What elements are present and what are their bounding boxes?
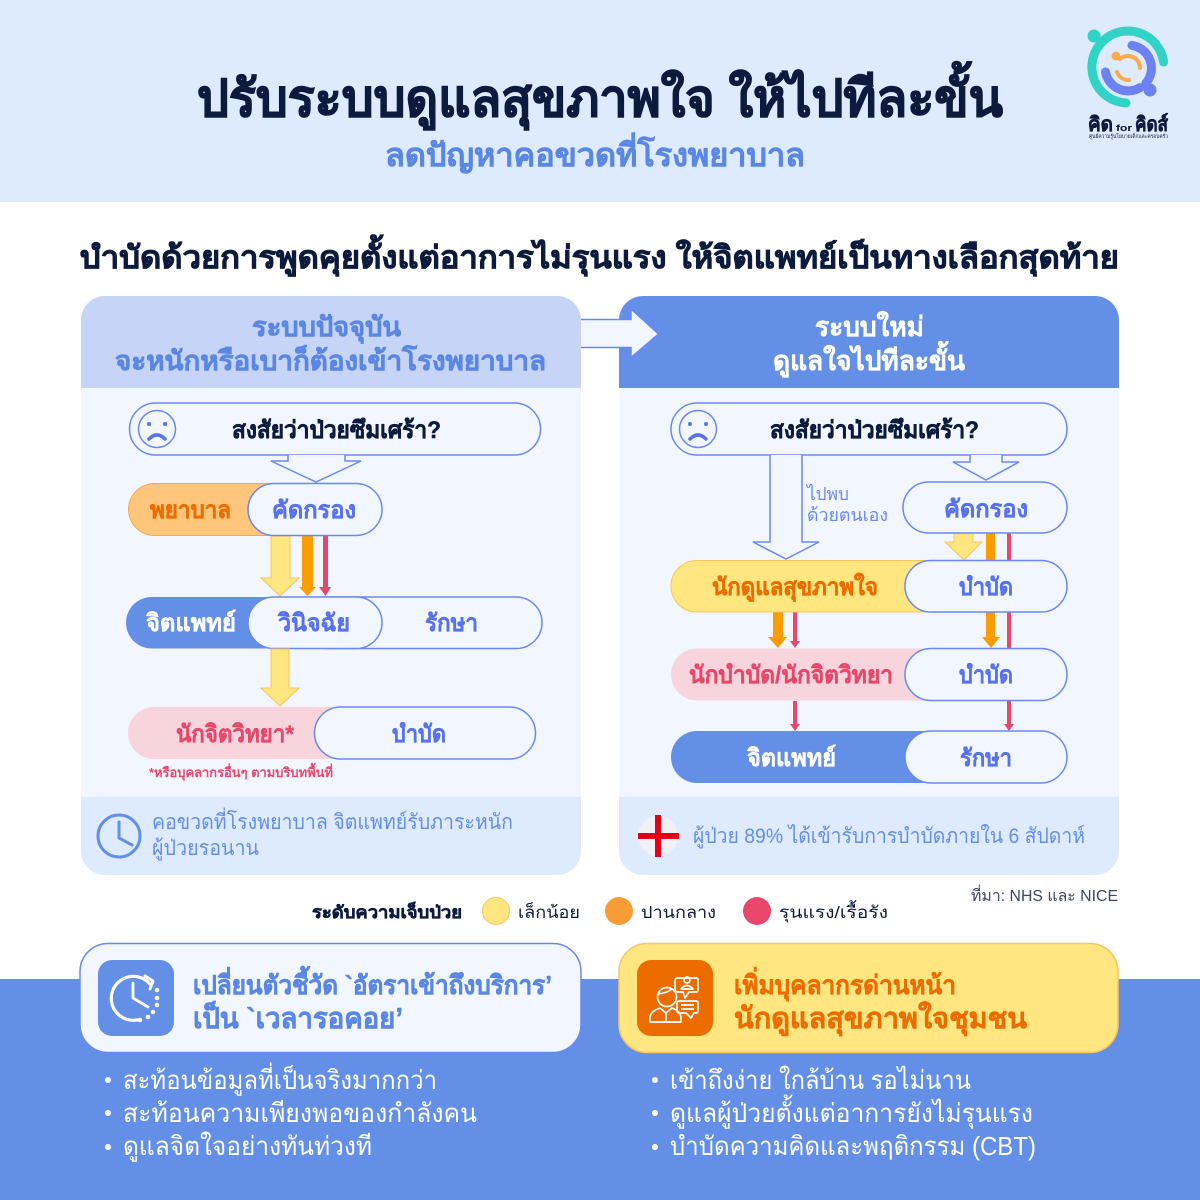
psychiatrist row (671, 731, 1067, 783)
icon: clock (98, 815, 140, 857)
panel heading: new system: ระบบใหม่ (815, 311, 924, 342)
arrow: to triage (953, 455, 1019, 480)
arrow: to triage (271, 455, 361, 482)
arrow: current to new (581, 309, 658, 358)
label: self referral: ด้วยตนเอง (807, 505, 888, 525)
psychiatrist row: รักษา (960, 745, 1012, 772)
logo: คิด (1088, 114, 1113, 136)
psychiatrist row: รักษา (425, 610, 478, 637)
question pill: สงสัยว่าป่วยซึมเศร้า? (232, 417, 441, 444)
legend: รุนแรง/เรื้อรัง (779, 900, 888, 923)
nurse triage row: พยาบาล (150, 497, 231, 524)
legend: ปานกลาง (641, 903, 716, 922)
psychiatrist row: จิตแพทย์ (146, 609, 236, 637)
panel heading: current system: ระบบปัจจุบัน (252, 312, 402, 344)
bullets: left: ดูแลจิตใจอย่างทันท่วงที (123, 1131, 372, 1162)
icon: clock with dotted arrow (98, 960, 174, 1036)
therapist row: นักบำบัด/นักจิตวิทยา (689, 662, 893, 689)
psychiatrist row (126, 597, 542, 648)
label: self referral: ไปพบ (805, 483, 849, 504)
logo (1088, 30, 1169, 140)
therapist row: บำบัด (959, 662, 1013, 689)
psychologist row: บำบัด (392, 721, 446, 748)
panel heading: new system (773, 311, 966, 378)
psychiatrist row: วินิจฉัย (277, 610, 350, 637)
arrows: coach to therapist (768, 612, 1011, 649)
icon: counsellor with chat bubbles (637, 960, 713, 1036)
bullets: right: เข้าถึงง่าย ใกล้บ้าน รอไม่นาน (670, 1065, 971, 1095)
card text: เพิ่มบุคลากรด่านหน้า (734, 966, 956, 1002)
panel heading: new system: ดูแลใจไปทีละขั้น (773, 340, 966, 378)
bullets: left (105, 1062, 477, 1162)
card text: เป็น `เวลารอคอย’ (193, 1000, 403, 1035)
footer text: current problem: ผู้ป่วยรอนาน (152, 837, 259, 861)
mental health coach row: นักดูแลสุขภาพใจ (712, 572, 878, 603)
footnote: *หรือบุคลากรอื่นๆ ตามบริบทพื้นที่ (149, 762, 333, 781)
panel heading: current system (115, 312, 546, 376)
card text: เปลี่ยนตัวชี้วัด `อัตราเข้าถึงบริการ’ (193, 965, 552, 1000)
question pill (130, 403, 540, 455)
mental health coach row (671, 560, 1067, 612)
question pill (671, 403, 1067, 455)
footer text: current problem (152, 807, 513, 861)
arrows: triage to coach (945, 533, 1011, 561)
bullets: right: บำบัดความคิดและพฤติกรรม (CBT) (670, 1131, 1036, 1161)
bottom blue band (0, 979, 1200, 1200)
subtitle: ลดปัญหาคอขวดที่โรงพยาบาล (385, 132, 805, 174)
logo: ศูนย์ความรู้นโยบายเด็กและครอบครัว (1089, 132, 1168, 140)
panel heading: current system: จะหนักหรือเบาก็ต้องเข้าโรงพยาบาล (115, 343, 546, 376)
card text (193, 965, 552, 1035)
logo: คิดส์ (1135, 113, 1169, 136)
logo: for (1116, 123, 1133, 133)
icon: england flag (638, 815, 679, 857)
title: ปรับระบบดูแลสุขภาพใจ ให้ไปทีละขั้น (197, 61, 1003, 131)
mental health coach row: บำบัด (959, 574, 1013, 601)
psychologist row (128, 707, 536, 759)
footer text: current problem: คอขวดที่โรงพยาบาล จิตแพทย์รับภาระหนัก (152, 807, 513, 834)
arrows: nurse to psychiatrist (261, 536, 331, 596)
source: ที่มา: NHS และ NICE (971, 884, 1118, 905)
footer text: result: ผู้ป่วย 89% ได้เข้ารับการบำบัดภายใน 6 สัปดาห์ (693, 824, 1085, 849)
arrows: therapist to psychiatrist (790, 701, 1014, 731)
triage pill: คัดกรอง (944, 496, 1028, 523)
bullets: right: ดูแลผู้ป่วยตั้งแต่อาการยังไม่รุนแรง (670, 1094, 1033, 1129)
header band (0, 0, 1200, 202)
arrow: self referral (753, 455, 819, 559)
card: waiting time metric (80, 944, 581, 1052)
therapist row (671, 648, 1067, 700)
legend: ระดับความเจ็บป่วย (312, 900, 462, 922)
card: community coach (619, 944, 1118, 1052)
arrow: psychiatrist to psychologist (261, 649, 299, 706)
legend: เล็กน้อย (518, 901, 580, 922)
bullets: right (652, 1065, 1036, 1161)
nurse triage row (128, 484, 382, 536)
label: self referral (805, 483, 888, 525)
legend (312, 897, 888, 925)
triage pill (903, 482, 1067, 533)
bullets: left: สะท้อนความเพียงพอของกำลังคน (123, 1098, 477, 1128)
main heading: บำบัดด้วยการพูดคุยตั้งแต่อาการไม่รุนแรง ให้จิตแพทย์เป็นทางเลือกสุดท้าย (80, 234, 1119, 277)
card text: นักดูแลสุขภาพใจชุมชน (734, 1001, 1027, 1036)
psychiatrist row: จิตแพทย์ (747, 744, 836, 772)
question pill: สงสัยว่าป่วยซึมเศร้า? (770, 417, 979, 444)
card text (734, 966, 1027, 1036)
panel: current system (81, 296, 581, 875)
nurse triage row: คัดกรอง (272, 497, 356, 524)
panel: new system (619, 296, 1119, 875)
bullets: left: สะท้อนข้อมูลที่เป็นจริงมากกว่า (123, 1062, 437, 1096)
psychologist row: นักจิตวิทยา* (176, 721, 295, 748)
